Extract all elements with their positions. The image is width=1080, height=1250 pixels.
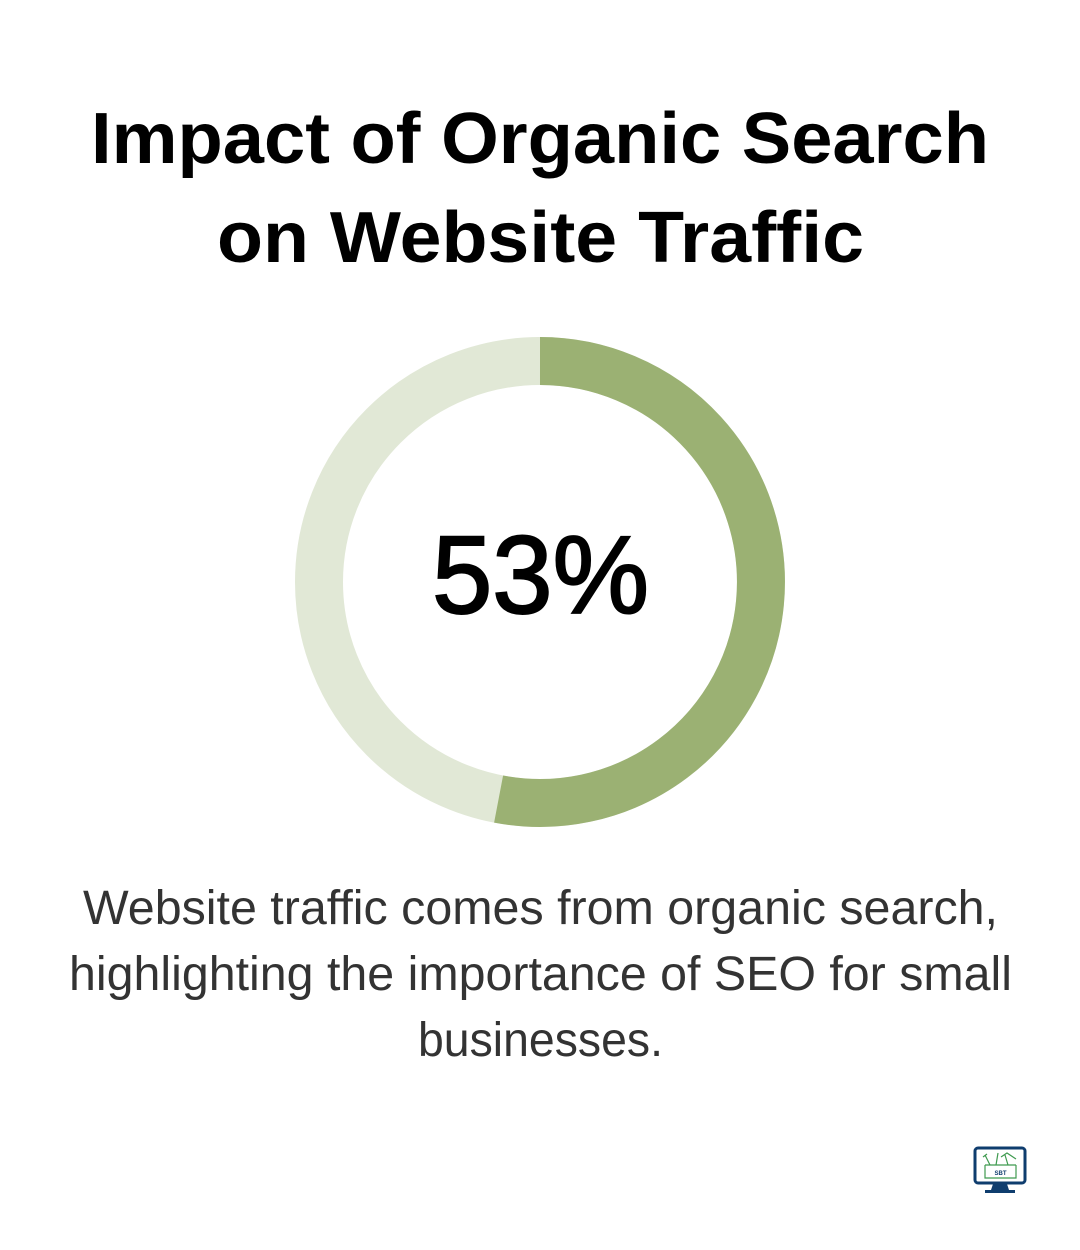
description text: businesses. (418, 1014, 663, 1067)
description text: highlighting the importance of SEO for small (69, 948, 1012, 1001)
title: Impact of Organic Search (91, 99, 989, 179)
central percentage: 53% (432, 514, 649, 637)
icon: SBT monitor logo: SBT (994, 1171, 1007, 1177)
description text (69, 882, 1012, 1067)
title: on Website Traffic (217, 198, 864, 278)
title (91, 99, 989, 278)
donut chart: 53% (319, 361, 761, 803)
description text: Website traffic comes from organic search, (83, 882, 998, 935)
icon: SBT monitor logo (975, 1148, 1025, 1193)
